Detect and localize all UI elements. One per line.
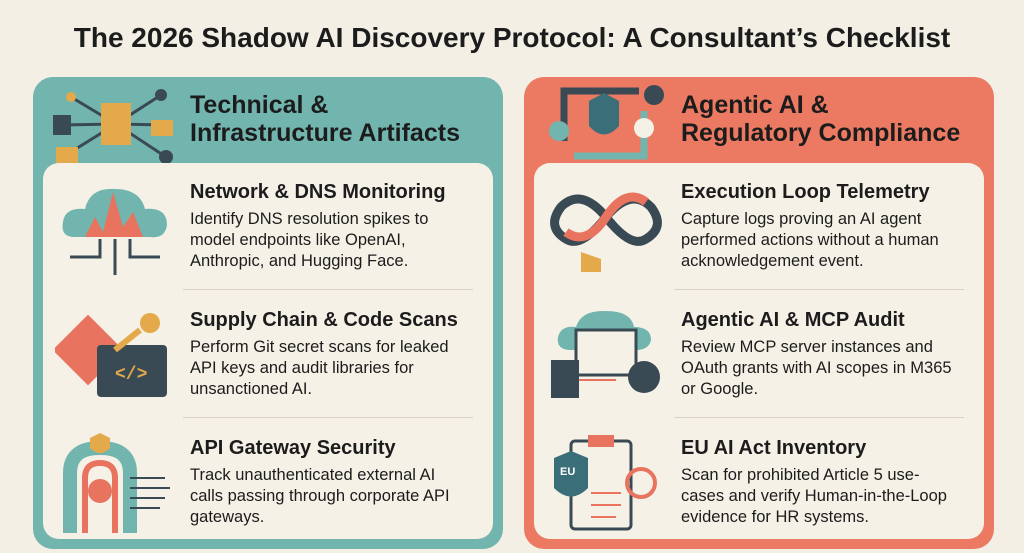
- heading: agentic: [681, 91, 960, 147]
- item: supply chain: Supply Chain & Code Scans: [190, 309, 458, 331]
- item: execution loop: [550, 181, 939, 272]
- item: eu ai act: [554, 435, 947, 530]
- heading: technical: Technical &: [190, 91, 328, 119]
- panel: agentic: [524, 77, 994, 549]
- item: execution loop: Execution Loop Telemetry: [681, 181, 930, 203]
- item: mcp audit: [551, 309, 952, 398]
- item: eu ai act: Scan for prohibited Article 5 use-cases and verify Human-in-the-Loop evidence for HR systems.: [681, 466, 947, 526]
- panel: technical: [33, 77, 503, 549]
- item: supply chain: </>: [115, 365, 147, 385]
- item: mcp audit: Agentic AI & MCP Audit: [681, 309, 905, 331]
- item: mcp audit: Review MCP server instances and OAuth grants with AI scopes in M365 or Google.: [681, 338, 952, 398]
- item: api gateway: Track unauthenticated external AI calls passing through corporate API gateways.: [190, 466, 450, 526]
- item: api gateway: [63, 433, 450, 533]
- item: api gateway: API Gateway Security: [190, 437, 396, 459]
- item: network dns: Identify DNS resolution spikes to model endpoints like OpenAI, Anthropic, and Hugging Face.: [190, 210, 428, 270]
- card: technical items: [43, 163, 493, 539]
- title: The 2026 Shadow AI Discovery Protocol: A Consultant’s Checklist: [74, 22, 950, 53]
- item: supply chain: Perform Git secret scans for leaked API keys and audit libraries for unsanctioned AI.: [190, 338, 449, 398]
- heading: technical: Infrastructure Artifacts: [190, 119, 460, 147]
- item: eu ai act: EU AI Act Inventory: [681, 437, 866, 459]
- item: network dns: Network & DNS Monitoring: [190, 181, 446, 203]
- icon: shield loop: [549, 85, 664, 160]
- item: eu ai act: EU: [560, 466, 575, 478]
- icon: network hub: [53, 89, 173, 163]
- item: execution loop: Capture logs proving an AI agent performed actions without a human acknowledgement event.: [681, 210, 939, 270]
- item: supply chain: [55, 309, 458, 398]
- heading: agentic: Agentic AI &: [681, 91, 829, 119]
- heading: agentic: Regulatory Compliance: [681, 119, 960, 147]
- item: network dns: [62, 181, 446, 275]
- heading: technical: [190, 91, 460, 147]
- card: agentic items: [534, 163, 984, 539]
